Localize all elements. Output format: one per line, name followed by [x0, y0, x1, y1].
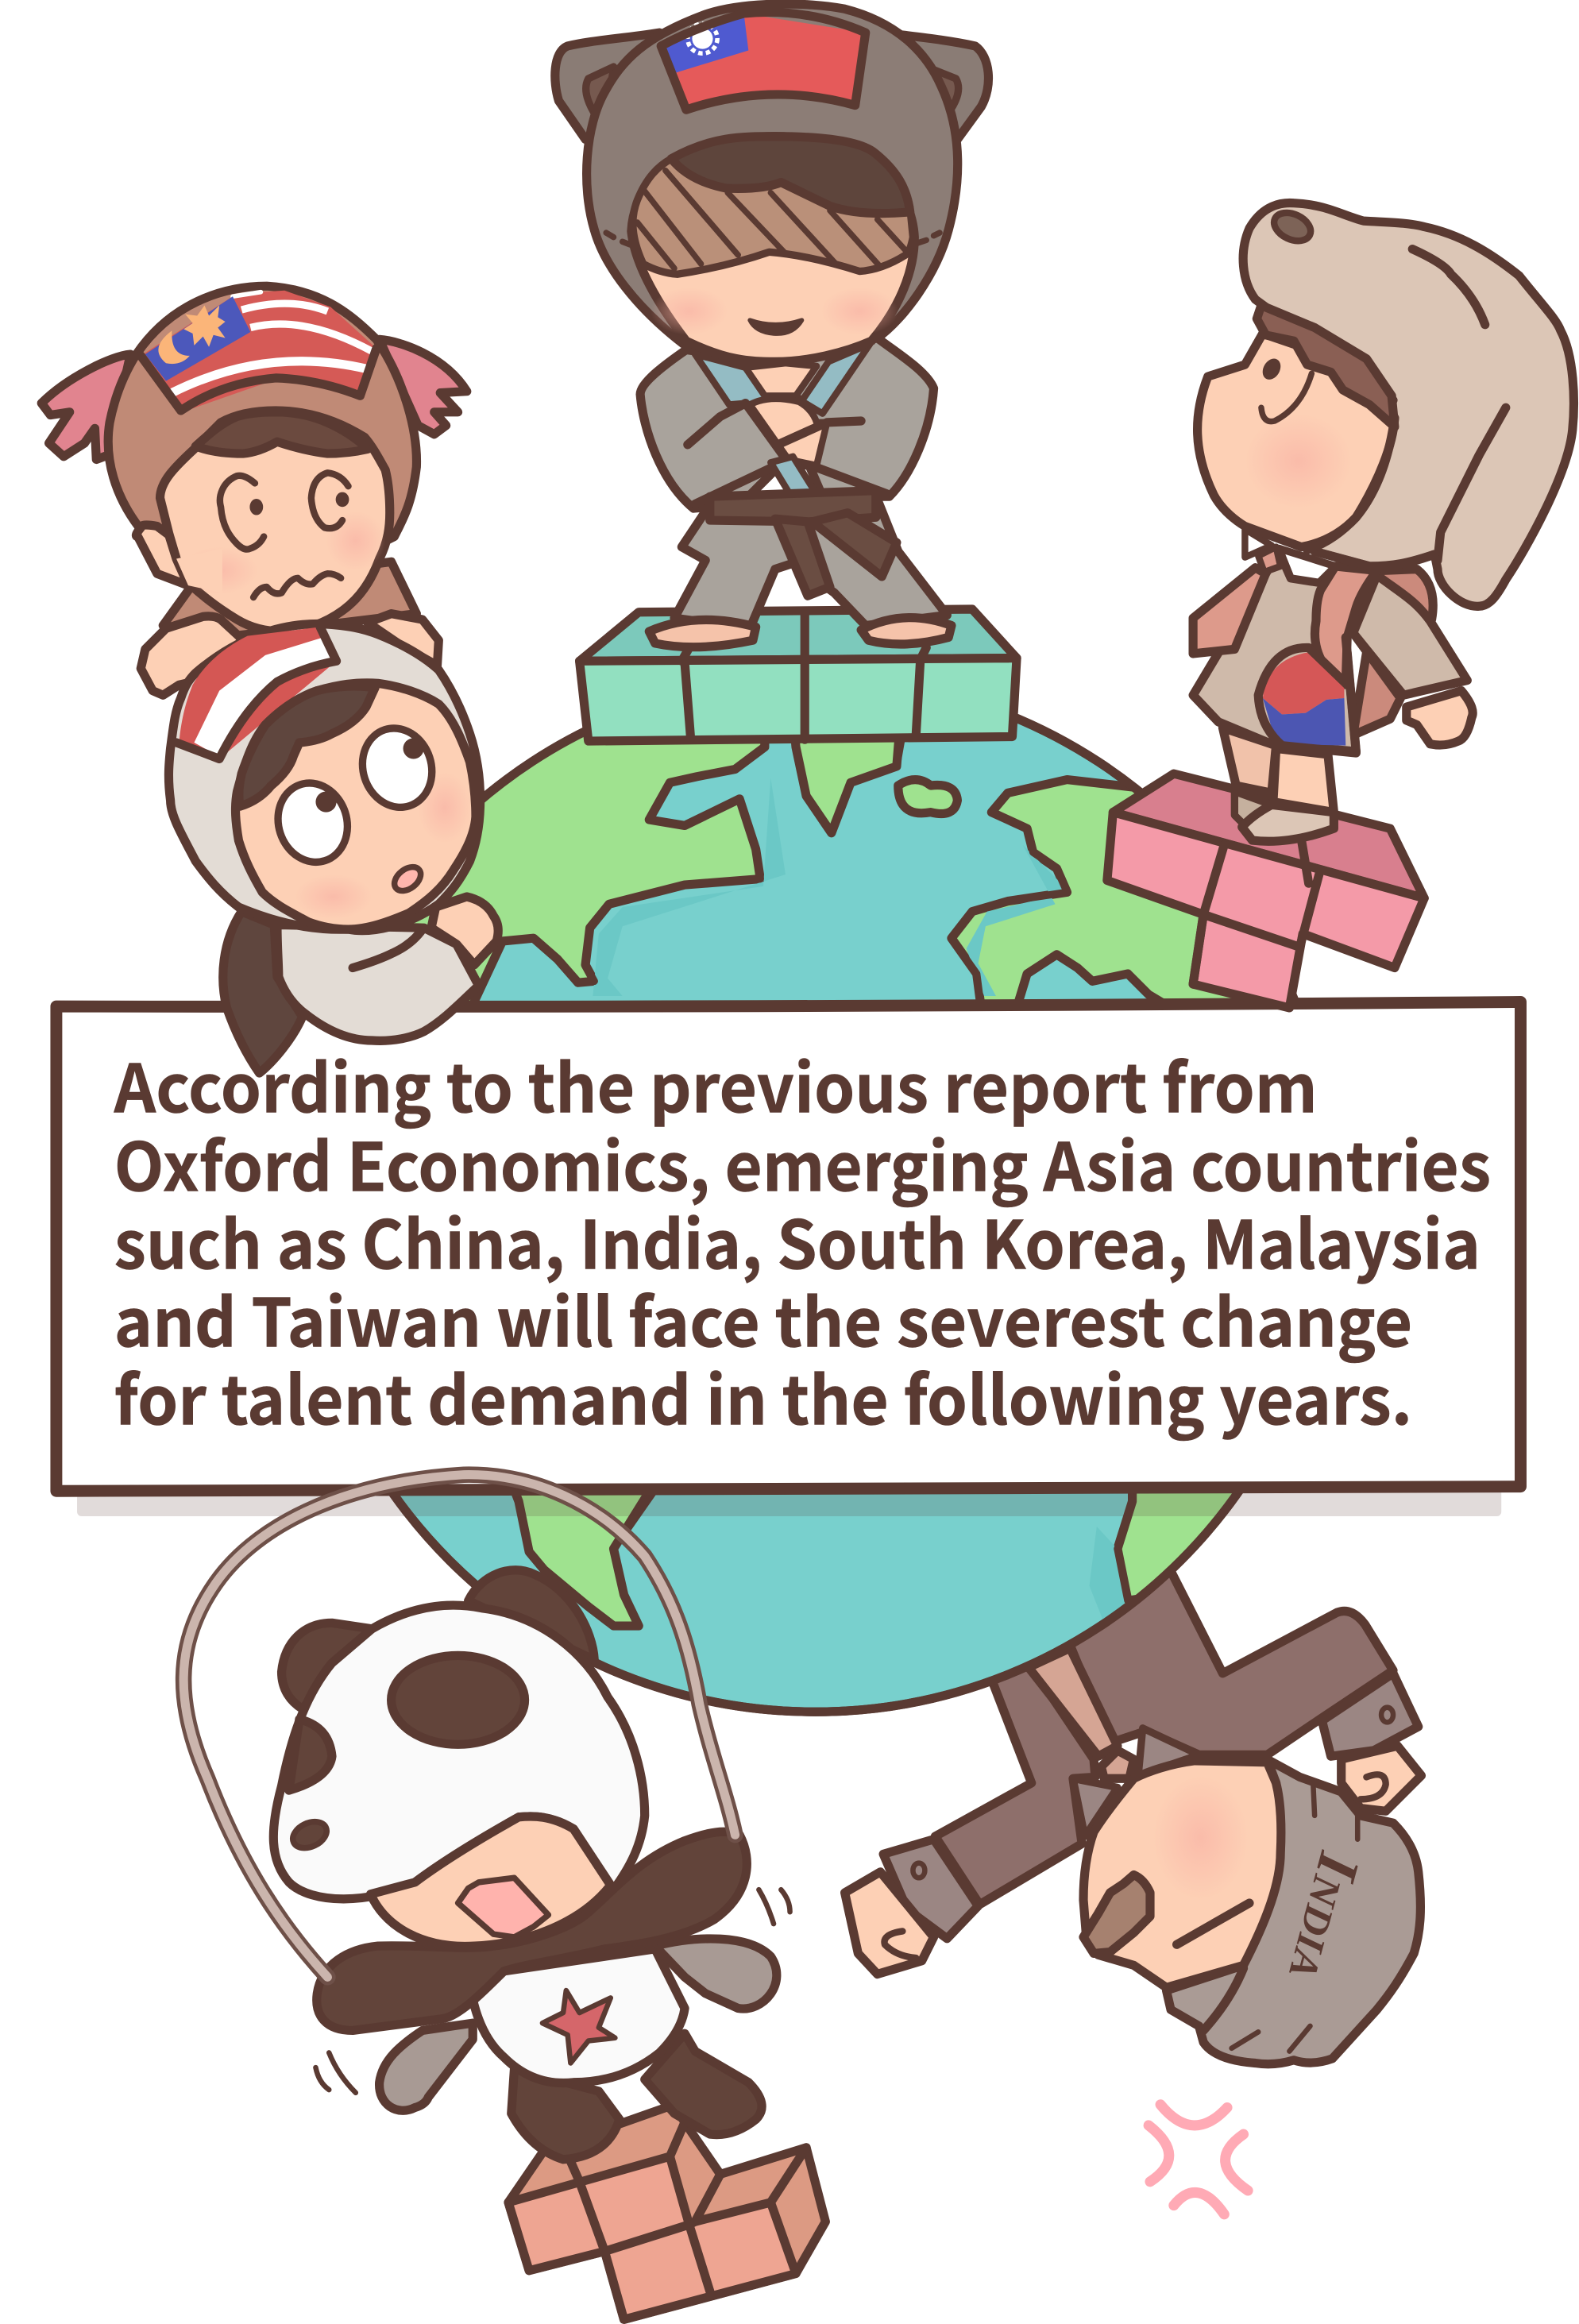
character: India, jacket and trousers behind the globe — [935, 1571, 1393, 1905]
hair — [239, 686, 375, 806]
hood — [168, 624, 481, 931]
text panel — [56, 1002, 1520, 1491]
ears — [555, 33, 659, 139]
mouth — [390, 863, 425, 896]
motion marks — [315, 1890, 790, 2093]
collar — [695, 344, 870, 430]
face — [631, 137, 914, 361]
strap left — [1193, 568, 1266, 654]
box shadow — [77, 1488, 1501, 1516]
hands — [1342, 1746, 1421, 1811]
hands — [141, 616, 243, 695]
hand — [1407, 691, 1473, 745]
hand — [431, 897, 498, 965]
ears — [282, 1623, 372, 1709]
hair — [195, 412, 368, 454]
face — [236, 683, 476, 929]
backpack — [1353, 569, 1433, 735]
hood edge lower — [1307, 418, 1395, 550]
face — [160, 411, 390, 631]
cuffs — [1322, 1674, 1419, 1756]
flag — [180, 627, 337, 759]
gray arms — [655, 1939, 777, 2009]
side dashes — [606, 233, 940, 245]
description text: and Taiwan will face the severest change — [114, 1270, 1412, 1366]
description text: for talent demand in the following years. — [114, 1348, 1412, 1444]
icon: anger mark — [1149, 2105, 1248, 2214]
character: Malaysia koala — [41, 286, 467, 695]
character: Taiwan bear — [555, 4, 988, 647]
hatched shadow — [633, 159, 913, 274]
continent: right land mass — [947, 775, 1231, 999]
arm — [1353, 575, 1467, 695]
hands — [750, 399, 827, 465]
eye — [1177, 1903, 1249, 1944]
collar — [1138, 1728, 1199, 1776]
continent: peninsula — [791, 742, 902, 837]
legs — [512, 2069, 620, 2160]
body behind — [163, 562, 416, 637]
shoes — [1234, 792, 1272, 825]
flag patch — [1263, 652, 1344, 714]
character: China panda — [183, 1475, 790, 2160]
hood — [1243, 203, 1573, 606]
description text: Oxford Economics, emerging Asia countries — [114, 1114, 1491, 1210]
continent: left land mass — [414, 737, 769, 1001]
hood — [273, 1605, 645, 1899]
mouth — [458, 1878, 548, 1937]
block: green — [580, 609, 1017, 741]
hood — [587, 4, 958, 344]
ears — [41, 354, 130, 460]
collar — [1245, 529, 1272, 558]
description text: such as China, India, South Korea, Malaysia — [114, 1192, 1481, 1288]
globe — [389, 713, 1298, 1716]
hair — [671, 137, 910, 214]
flag — [141, 291, 376, 412]
torso — [1193, 551, 1356, 751]
hair — [1257, 305, 1395, 427]
belt — [710, 491, 876, 522]
body — [277, 925, 479, 1040]
cap — [1167, 1759, 1420, 2064]
body — [674, 492, 947, 628]
face — [370, 1816, 611, 1946]
arms — [317, 1832, 747, 2030]
rope — [183, 1475, 735, 1977]
ear nub — [136, 525, 188, 585]
character: South Korea dog — [1193, 203, 1573, 841]
eyes — [220, 473, 349, 550]
crossed arms — [688, 403, 886, 504]
strap right — [1315, 566, 1376, 685]
block: orange — [508, 2105, 825, 2319]
continent: lower left land — [512, 1495, 647, 1631]
star — [542, 1990, 615, 2063]
feet — [649, 620, 756, 647]
ear — [1083, 1875, 1150, 1953]
hood — [108, 286, 416, 593]
smile — [750, 320, 801, 334]
mouth — [253, 573, 341, 597]
continent: lower right land — [1114, 1493, 1232, 1598]
continent: island — [898, 780, 957, 813]
character: Indonesia — [168, 624, 498, 1073]
belly — [473, 1949, 685, 2083]
face — [1198, 334, 1395, 547]
description text: According to the previous report from — [114, 1036, 1318, 1132]
block: pink — [1107, 774, 1424, 1008]
ponytail — [223, 912, 303, 1073]
INDIA label: INDIA — [1276, 1845, 1372, 1988]
legs — [1222, 728, 1276, 793]
eyes — [268, 774, 357, 871]
face — [1083, 1761, 1281, 1987]
character: India head and hands — [845, 1674, 1421, 2064]
flag — [661, 14, 866, 110]
